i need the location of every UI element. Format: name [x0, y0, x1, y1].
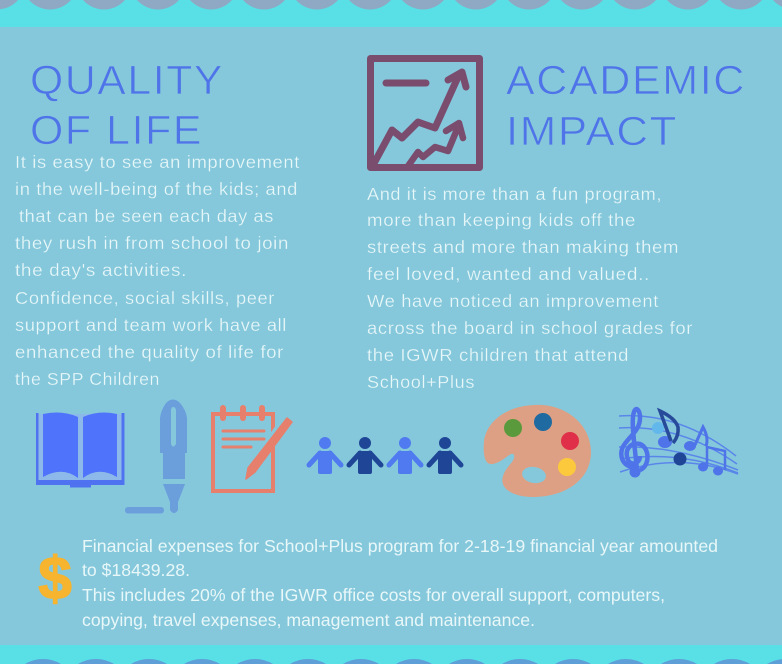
text block: quality of life: It is easy to see an improvement	[15, 152, 300, 172]
icon: open book	[36, 413, 124, 488]
text block: quality of life: that can be seen each day as	[19, 206, 274, 226]
heading: quality of life: QUALITY	[30, 57, 224, 103]
text block: academic impact: across the board in school grades for	[367, 318, 693, 338]
text block: academic impact: more than keeping kids off the	[367, 210, 636, 230]
top scalloped band	[0, 0, 782, 27]
text block: academic impact: feel loved, wanted and valued..	[367, 264, 650, 284]
text block: quality of life	[15, 152, 300, 389]
heading: academic impact	[506, 57, 746, 154]
text block: quality of life: the SPP Children	[15, 369, 160, 389]
bottom scalloped band	[0, 645, 782, 664]
icon: dollar sign: $	[38, 545, 72, 612]
text block: financial expenses: This includes 20% of the IGWR office costs for overall support, computers,	[82, 585, 665, 605]
text block: academic impact: streets and more than making them	[367, 237, 679, 257]
heading: academic impact: ACADEMIC	[506, 57, 746, 103]
icon: music notes	[619, 409, 738, 478]
text block: academic impact: the IGWR children that attend	[367, 345, 629, 365]
text block: academic impact: And it is more than a fun program,	[367, 184, 662, 204]
text block: quality of life: the day's activities.	[15, 260, 187, 280]
icon: rising chart	[370, 58, 480, 168]
icon: notepad and pencil	[213, 408, 292, 491]
text block: academic impact	[367, 184, 693, 392]
heading: quality of life: OF LIFE	[30, 107, 203, 153]
text block: academic impact: School+Plus	[367, 372, 475, 392]
text block: quality of life: in the well-being of the kids; and	[15, 179, 298, 199]
text block: quality of life: enhanced the quality of life for	[15, 342, 284, 362]
text block: financial expenses	[82, 536, 718, 630]
heading: academic impact: IMPACT	[506, 108, 678, 154]
heading: quality of life	[30, 57, 224, 153]
text block: financial expenses: copying, travel expenses, management and maintenance.	[82, 610, 535, 630]
icon: row of people	[309, 437, 461, 474]
text block: academic impact: We have noticed an improvement	[367, 291, 659, 311]
icon: pen	[125, 400, 187, 514]
text block: quality of life: they rush in from school to join	[15, 233, 289, 253]
text block: financial expenses: to $18439.28.	[82, 560, 190, 580]
icon: paint palette	[484, 405, 591, 497]
text block: financial expenses: Financial expenses for School+Plus program for 2-18-19 financial year amounted	[82, 536, 718, 556]
text block: quality of life: Confidence, social skills, peer	[15, 288, 275, 308]
text block: quality of life: support and team work have all	[15, 315, 287, 335]
